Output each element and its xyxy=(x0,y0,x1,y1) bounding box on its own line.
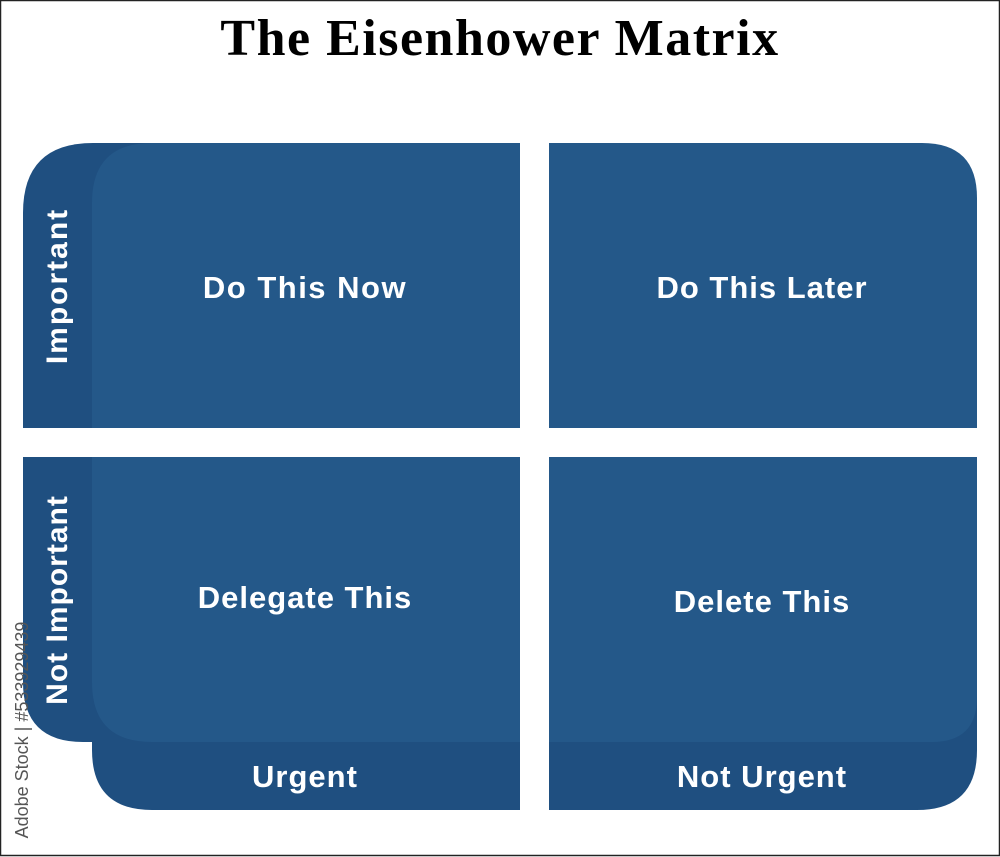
watermark id: Adobe Stock | #533929439 xyxy=(12,622,32,838)
title: The Eisenhower Matrix xyxy=(220,10,780,67)
quadrant: do this now xyxy=(23,143,520,428)
text: delegate this: Delegate This xyxy=(198,580,412,615)
inner panel: do this now xyxy=(92,143,520,428)
text: do this later: Do This Later xyxy=(656,270,868,305)
inner panel: delegate this xyxy=(92,457,520,742)
label: not important: Not Important xyxy=(41,495,74,705)
text: delete this: Delete This xyxy=(674,584,850,619)
inner panel: delete this xyxy=(549,457,977,742)
quadrant: do this later xyxy=(549,143,977,428)
label: not urgent: Not Urgent xyxy=(677,759,847,794)
label: important: Important xyxy=(41,208,74,364)
quadrant: delegate this xyxy=(23,457,520,810)
quadrant: delete this xyxy=(549,457,977,810)
label: urgent: Urgent xyxy=(252,759,358,794)
text: do this now: Do This Now xyxy=(203,270,407,305)
